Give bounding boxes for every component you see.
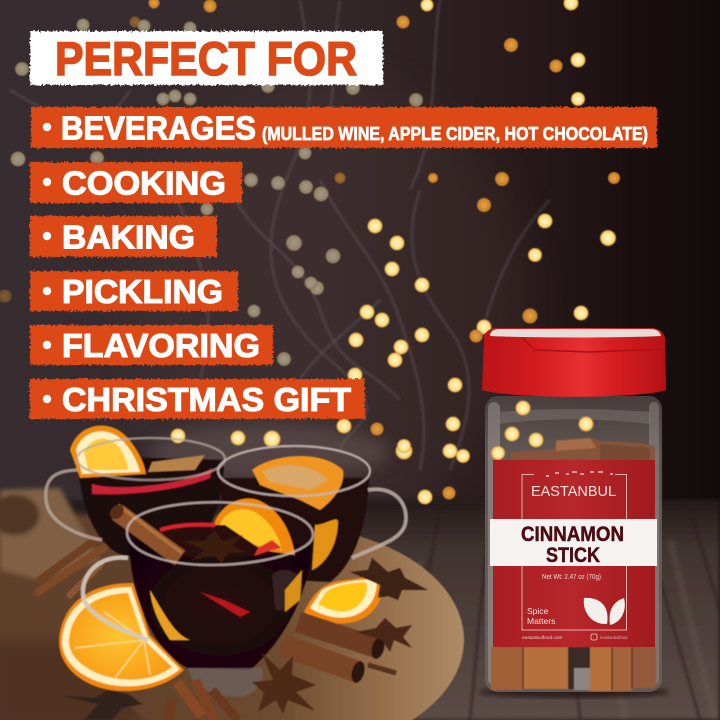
front mulled wine cup <box>83 499 313 697</box>
list item: beverages <box>31 107 657 148</box>
wine surface <box>160 524 265 558</box>
net weight: Net Wt: 2.47 oz (70g) <box>542 574 601 581</box>
cinnamon sticks on board <box>282 622 396 684</box>
food scene <box>38 426 428 720</box>
right orange slice on board <box>304 575 386 624</box>
cinnamon sticks at bottom of jar <box>491 647 656 691</box>
white heading banner <box>30 31 383 85</box>
fairy light wires <box>10 0 550 470</box>
red lid <box>482 328 666 397</box>
tagline: Matters <box>527 616 555 626</box>
clear jar body <box>485 396 662 692</box>
list item: beverages: (MULLED WINE, APPLE CIDER, HOT CHOCOLATE) <box>262 124 648 144</box>
star anise right back <box>350 558 428 600</box>
title: PERFECT FOR <box>55 32 357 85</box>
list item: flavoring: FLAVORING <box>62 327 260 364</box>
back left mulled wine cup <box>46 426 225 556</box>
brand logo: EASTANBUL <box>531 483 616 500</box>
bokeh seen through jar <box>491 400 594 460</box>
icon: instagram and handle: /eastanbulfood <box>600 635 628 640</box>
product name second line: STICK <box>546 543 600 567</box>
product name: CINNAMON <box>521 522 624 546</box>
cinnamon stick in cup <box>107 502 182 558</box>
white name band <box>490 519 657 566</box>
steam and wool behind cups <box>150 424 390 480</box>
list item: cooking <box>30 162 242 203</box>
list item: christmas gift: CHRISTMAS GIFT <box>62 381 351 418</box>
glass rim <box>127 502 313 565</box>
cup handle <box>83 558 148 640</box>
bokeh fairy lights <box>0 0 620 504</box>
product jar <box>479 328 669 698</box>
list item: baking: BAKING <box>62 218 195 256</box>
burlap cloth and table on the left <box>0 488 310 720</box>
star anise in cup <box>184 530 246 563</box>
jar shadow <box>479 686 669 698</box>
wooden round board <box>96 525 464 720</box>
list item: cooking: COOKING <box>62 164 226 202</box>
brand logo <box>531 472 616 500</box>
back right mulled wine cup <box>218 446 406 582</box>
orange slice in cup <box>214 499 295 555</box>
cinnamon sticks behind cup on cloth <box>38 540 105 595</box>
list item: beverages: BEVERAGES <box>61 110 256 146</box>
icon: leaves <box>584 598 625 625</box>
list item: baking <box>30 216 217 257</box>
wooden floor <box>0 500 720 720</box>
tagline: Spice <box>527 606 549 616</box>
icon: instagram and handle <box>591 634 628 640</box>
website: eastanbulfood.com <box>522 635 563 641</box>
star anise bottom left <box>62 690 142 720</box>
label frame <box>522 474 626 630</box>
small cinnamon sticks bottom <box>168 680 238 720</box>
list item: pickling: PICKLING <box>62 273 223 310</box>
product label <box>490 460 657 647</box>
star anise on board right <box>356 618 412 652</box>
warm background glow <box>130 80 530 520</box>
cinnamon sticks at top of jar <box>510 438 655 460</box>
front left orange slice <box>59 583 184 691</box>
star anise front centre <box>252 653 316 714</box>
